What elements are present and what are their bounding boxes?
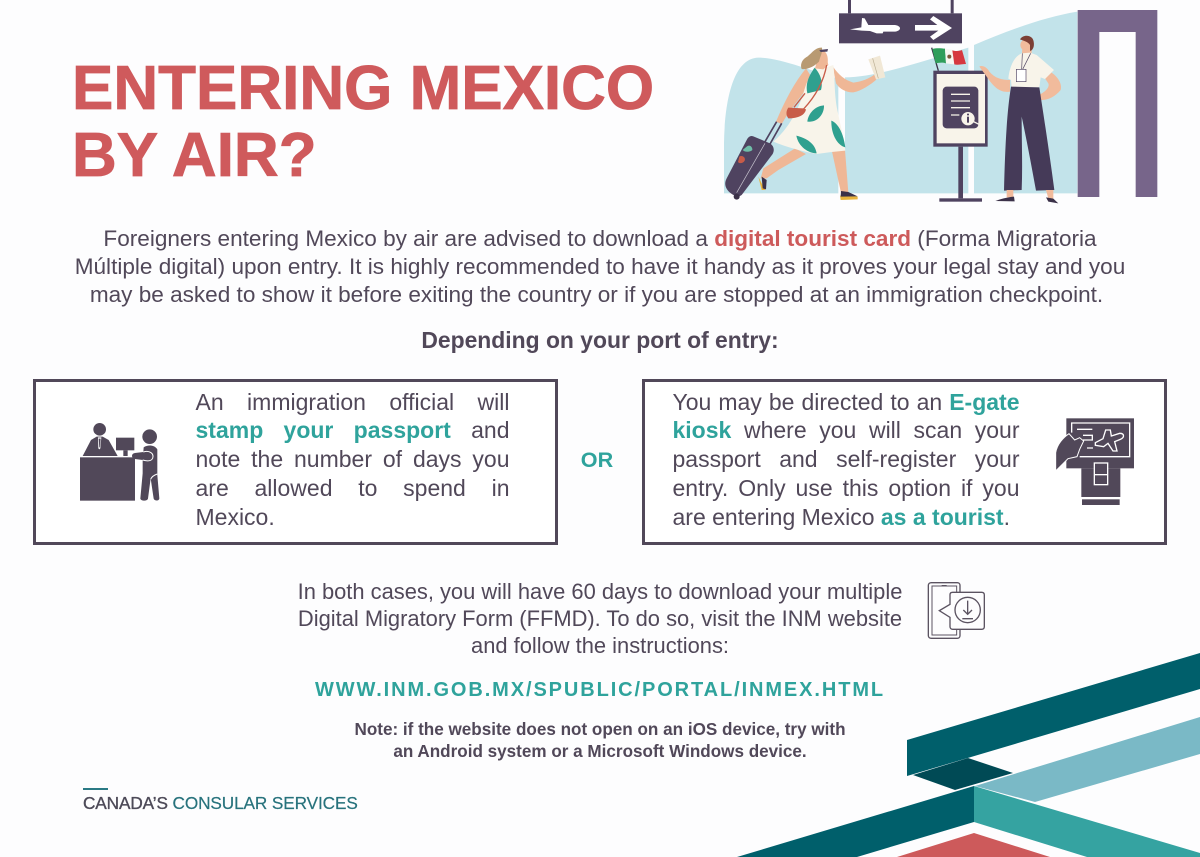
stamp passport text: stamp your passport and bbox=[196, 417, 510, 443]
hair bbox=[801, 48, 822, 69]
e-gate text: passport and self-register your bbox=[672, 446, 1020, 472]
intro paragraph: Múltiple digital) upon entry. It is highly recommended to have it handy as it proves your legal stay and you bbox=[75, 254, 1125, 279]
OR label: OR bbox=[581, 447, 613, 472]
intro paragraph bbox=[75, 226, 1125, 307]
flag of Mexico bbox=[932, 48, 966, 71]
intro paragraph: may be asked to show it before exiting the country or if you are stopped at an immigration checkpoint. bbox=[90, 282, 1103, 307]
download instructions: and follow the instructions: bbox=[471, 633, 729, 658]
dress bbox=[773, 65, 845, 154]
title bbox=[72, 54, 654, 190]
note: an Android system or a Microsoft Windows device. bbox=[393, 742, 807, 760]
logo: Canada's Consular Services: CANADA’S CONSULAR SERVICES bbox=[83, 793, 358, 813]
download instructions: Digital Migratory Form (FFMD). To do so, visit the INM website bbox=[298, 606, 902, 631]
stamp passport text: are allowed to spend in bbox=[196, 475, 510, 501]
icon: immigration desk bbox=[80, 423, 160, 501]
download instructions bbox=[298, 579, 902, 658]
shirt bbox=[1008, 53, 1054, 87]
stamp passport text: An immigration official will bbox=[196, 388, 510, 414]
dress leaves bbox=[796, 68, 845, 153]
neck and face bbox=[815, 58, 828, 69]
e-gate text: are entering Mexico as a tourist. bbox=[672, 504, 1010, 530]
icon: e-gate kiosk bbox=[1056, 418, 1134, 505]
shoes bbox=[840, 196, 858, 200]
website link: WWW.INM.GOB.MX/SPUBLIC/PORTAL/INMEX.HTML bbox=[315, 679, 885, 701]
feet bbox=[1007, 190, 1053, 199]
icon: phone download bbox=[928, 582, 985, 639]
direction sign bbox=[839, 0, 962, 43]
bag bbox=[794, 65, 827, 109]
legs bbox=[761, 148, 806, 178]
arms bbox=[979, 66, 1010, 92]
subheading: Depending on your port of entry: bbox=[421, 327, 779, 353]
e-gate text: You may be directed to an E-gate bbox=[672, 388, 1020, 414]
information stand bbox=[933, 71, 988, 202]
tickets bbox=[868, 56, 885, 79]
gate bbox=[1078, 10, 1157, 197]
stamp passport text: note the number of days you bbox=[196, 446, 510, 472]
intro paragraph: Foreigners entering Mexico by air are advised to download a digital tourist card (Forma Migratoria bbox=[103, 226, 1097, 251]
trousers bbox=[1004, 87, 1054, 191]
traveller with suitcase bbox=[725, 48, 885, 200]
e-gate text: kiosk where you will scan your bbox=[672, 417, 1020, 443]
illustration: airport immigration scene bbox=[724, 0, 1158, 204]
background panels bbox=[724, 12, 1077, 193]
e-gate text: entry. Only use this option if you bbox=[672, 475, 1020, 501]
arms bbox=[776, 68, 813, 124]
note bbox=[354, 720, 846, 760]
stamp passport text bbox=[196, 388, 510, 530]
immigration officer bbox=[979, 36, 1061, 203]
title: ENTERING MEXICO bbox=[72, 54, 654, 123]
suitcase bbox=[765, 122, 782, 144]
download instructions: In both cases, you will have 60 days to download your multiple bbox=[298, 579, 902, 604]
panel: e-gate kiosk bbox=[642, 379, 1167, 545]
note: Note: if the website does not open on an iOS device, try with bbox=[354, 720, 846, 739]
stamp passport text: Mexico. bbox=[196, 504, 275, 530]
title: BY AIR? bbox=[72, 121, 317, 190]
neck and head bbox=[1022, 43, 1032, 57]
e-gate text bbox=[672, 388, 1020, 530]
panel: stamp passport bbox=[33, 379, 558, 545]
